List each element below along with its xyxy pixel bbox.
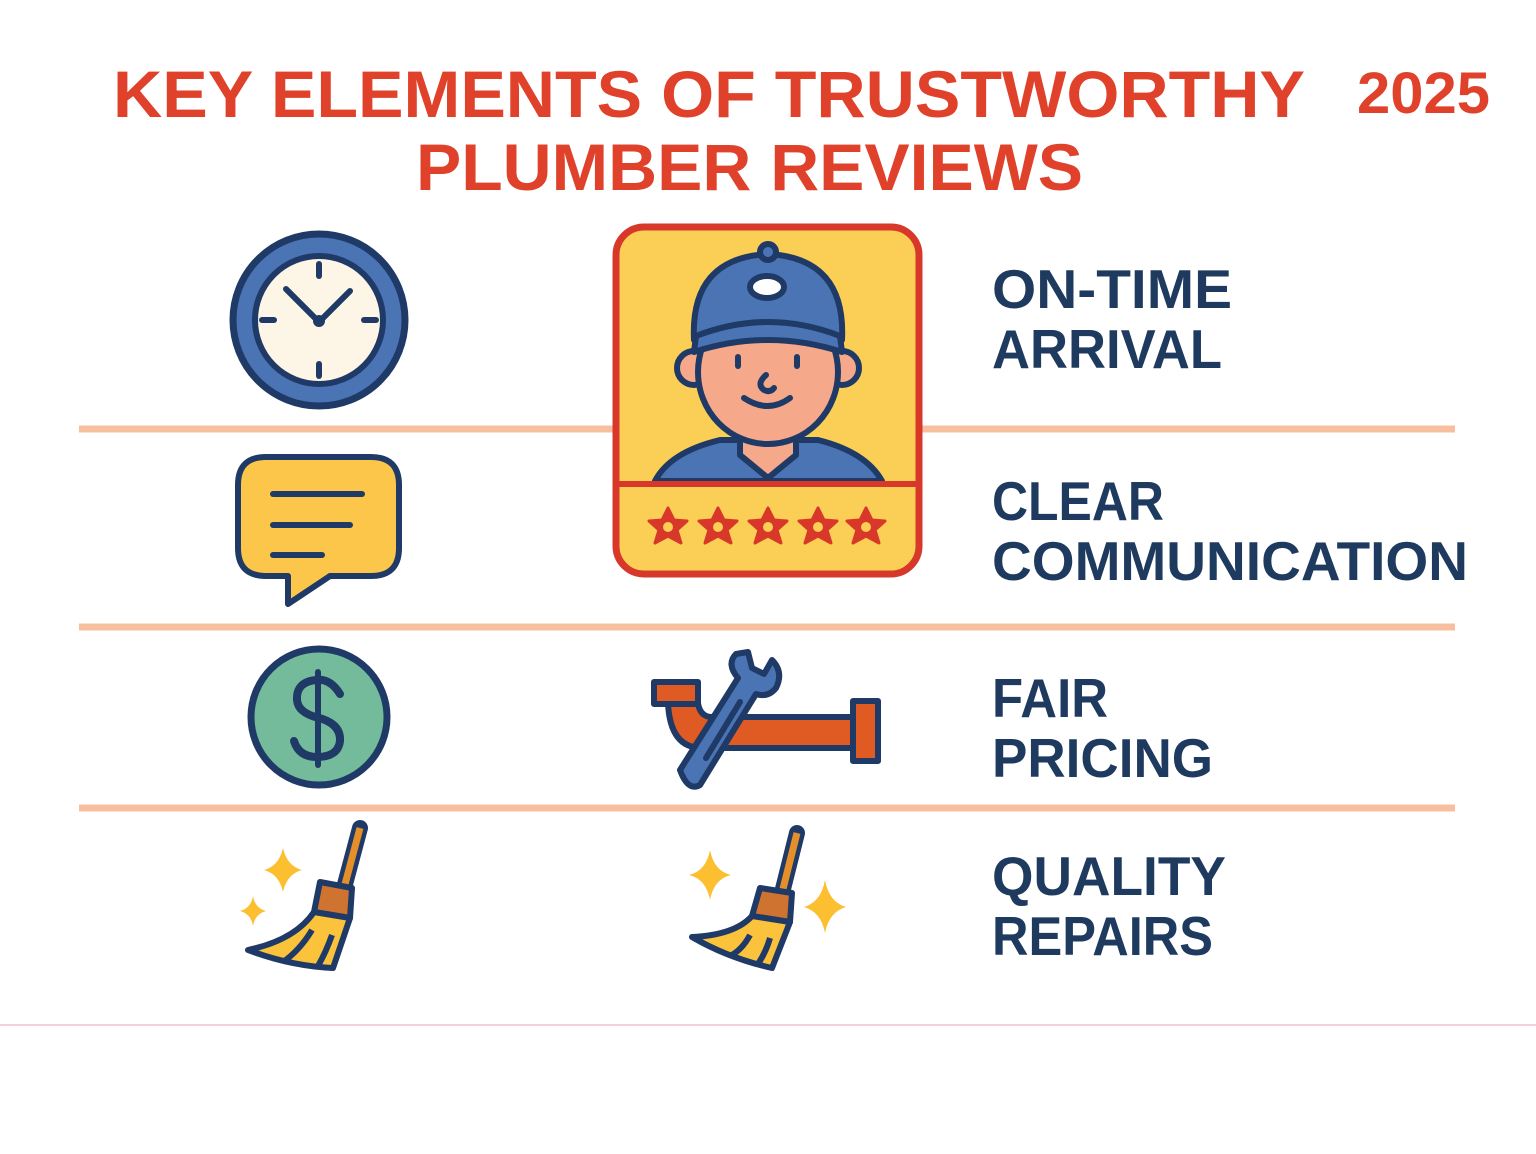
title: 2025 (1357, 61, 1490, 126)
title (113, 57, 1490, 204)
labels: ON-TIME (992, 258, 1232, 320)
labels: FAIR (992, 667, 1108, 729)
labels (992, 258, 1468, 967)
labels: REPAIRS (992, 905, 1213, 967)
labels: PRICING (992, 727, 1213, 789)
icon: dollar coin (251, 649, 387, 785)
icon: broom right (689, 833, 846, 968)
labels: CLEAR (992, 470, 1164, 532)
labels: ARRIVAL (992, 318, 1222, 380)
labels: QUALITY (992, 845, 1226, 907)
icon: pipe and wrench (654, 652, 878, 787)
title: KEY ELEMENTS OF TRUSTWORTHY (113, 57, 1305, 131)
labels: COMMUNICATION (992, 530, 1468, 592)
stars (649, 508, 885, 543)
icon: clock (233, 234, 405, 406)
icon: broom left (240, 828, 360, 968)
card: plumber rating (616, 227, 919, 574)
title: PLUMBER REVIEWS (416, 130, 1083, 204)
plumber figure (655, 244, 882, 481)
icon: chat bubble (238, 457, 399, 604)
